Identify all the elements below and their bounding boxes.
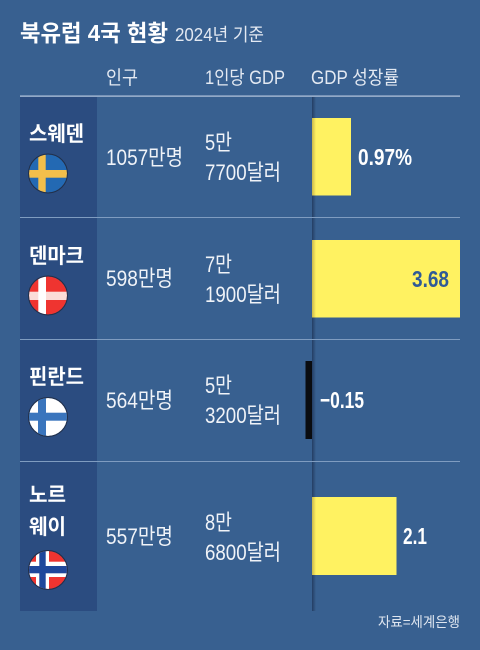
GDP per capita: Norway: 6800달러 bbox=[205, 540, 281, 565]
source note: 자료=세계은행 bbox=[378, 614, 460, 630]
value: Denmark growth: 3.68 bbox=[412, 266, 449, 292]
GDP per capita: Finland bbox=[205, 373, 281, 428]
population: Finland: 564만명 bbox=[106, 388, 173, 413]
title: 2024년 기준 bbox=[175, 25, 264, 45]
GDP per capita: Finland: 3200달러 bbox=[205, 403, 281, 428]
population: Norway: 557만명 bbox=[106, 524, 173, 549]
title bbox=[20, 20, 264, 46]
row: Denmark bbox=[28, 240, 460, 318]
GDP per capita: Norway bbox=[205, 510, 281, 565]
row: Sweden bbox=[28, 118, 412, 196]
value: Finland growth: −0.15 bbox=[320, 387, 364, 413]
GDP per capita: Finland: 5만 bbox=[205, 373, 232, 398]
population: Denmark: 598만명 bbox=[106, 266, 173, 291]
column headers: GDP 성장률 bbox=[311, 67, 399, 89]
country name: Norway: 웨이 bbox=[29, 516, 66, 539]
icon: Danish flag bbox=[28, 276, 68, 316]
row dividers bbox=[20, 96, 460, 462]
value: Norway growth: 2.1 bbox=[403, 523, 427, 549]
bar: Sweden growth bbox=[312, 118, 351, 196]
icon: Finnish flag bbox=[28, 397, 68, 437]
GDP per capita: Sweden bbox=[205, 130, 281, 185]
GDP per capita: Denmark bbox=[205, 252, 281, 307]
title: 북유럽 4국 현황 bbox=[20, 20, 168, 46]
value: Sweden growth: 0.97% bbox=[358, 144, 412, 170]
GDP per capita: Denmark: 1900달러 bbox=[205, 282, 281, 307]
panel: country name column bbox=[20, 97, 97, 611]
bar: Denmark growth bbox=[312, 240, 460, 318]
column headers bbox=[106, 67, 399, 89]
column headers: 인구 bbox=[106, 67, 138, 89]
country name: Finland: 핀란드 bbox=[29, 366, 84, 389]
GDP per capita: Norway: 8만 bbox=[205, 510, 232, 535]
column headers: 1인당 GDP bbox=[205, 67, 285, 89]
country name: Denmark: 덴마크 bbox=[29, 245, 84, 268]
chart axis shadow bbox=[312, 97, 316, 611]
country name: Norway: 노르 bbox=[29, 484, 66, 507]
row: Norway bbox=[28, 484, 427, 590]
icon: Swedish flag bbox=[28, 154, 68, 194]
GDP per capita: Sweden: 5만 bbox=[205, 130, 232, 155]
country name: Sweden: 스웨덴 bbox=[29, 123, 84, 146]
country name: Norway bbox=[29, 484, 66, 539]
GDP per capita: Denmark: 7만 bbox=[205, 252, 232, 277]
row: Finland bbox=[28, 361, 364, 439]
GDP per capita: Sweden: 7700달러 bbox=[205, 160, 281, 185]
icon: Norwegian flag bbox=[28, 550, 68, 590]
bar: Norway growth bbox=[312, 497, 396, 575]
bar: Finland growth (negative) bbox=[306, 361, 312, 439]
population: Sweden: 1057만명 bbox=[106, 145, 183, 170]
